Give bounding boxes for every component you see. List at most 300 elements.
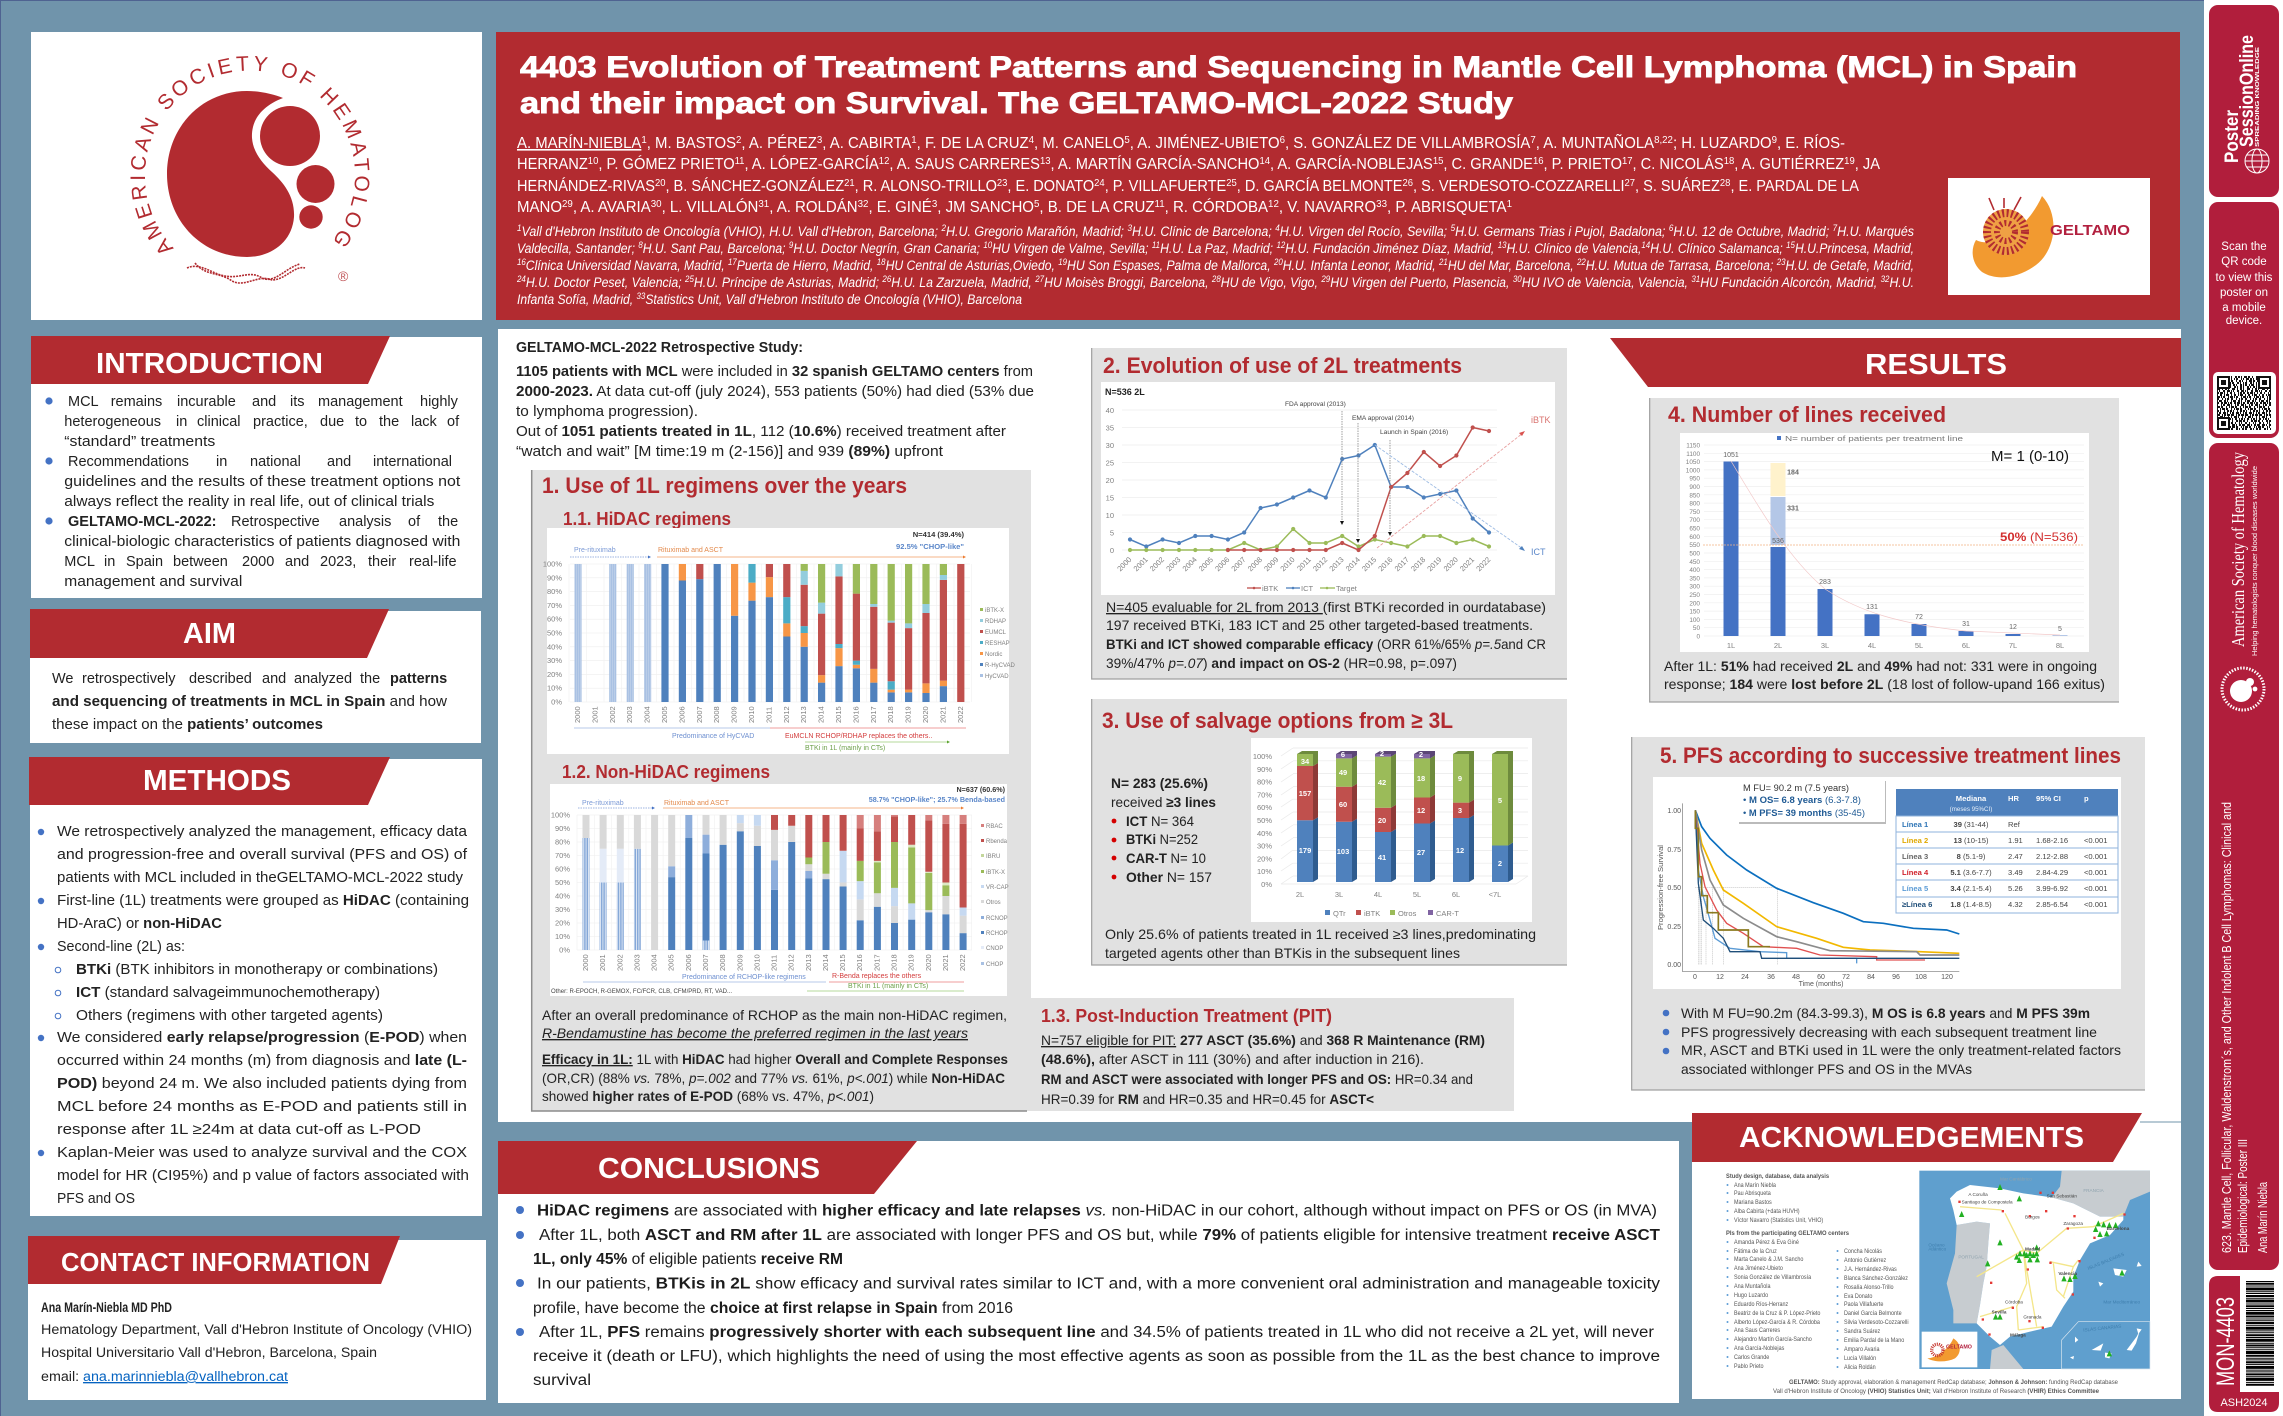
chart: 2L line chart: EMA approval (2014) [1352,415,1414,422]
conclusions text: After 1L, both ASCT and RM after 1L are associated with longer PFS and OS but, while 79% of patients eligible for intensive treatment receive ASCT [539,1227,1661,1244]
section 1 commentary [542,1008,1008,1104]
chart: HiDAC stacked bars: 2008 [712,706,721,723]
chart: 3D stacked bars: 2 [1380,749,1384,758]
introduction text: Retrospective [231,514,320,530]
chart: lines bar chart: 1000 [1686,467,1700,474]
chart: 2L line chart: 2005 [1197,555,1215,573]
chart: HiDAC stacked bars: 70% [547,601,562,610]
ASH name vertical: American Society of Hematology [2228,452,2248,647]
acknowledgement lists: Carlos Grande [1734,1353,1770,1361]
table: median PFS per line: p [2084,794,2089,803]
section 1 commentary: (OR,CR) (88% vs. 78%, p=.002 and 77% vs. 61%, p<.001) while Non-HiDAC [542,1071,1005,1086]
chart: 3D stacked bars: 3L [1335,890,1343,899]
table: median PFS per line: Línea 5 [1902,884,1929,893]
chart: Kaplan-Meier PFS curves: Progression-free Survival [1656,845,1665,930]
table: median PFS per line: Línea 2 [1902,836,1928,845]
introduction text: the [379,414,399,430]
chart: 2L line chart: ICT [1531,547,1546,557]
affiliations: Valdecilla, Santander; 8H.U. Sant Pau, Barcelona; 9H.U. Doctor Negrín, Gran Canaria; 10HU Virgen de Valme, Sevilla; 11H.U. La Paz, Madrid; 12H.U. Fundación Jiménez Díaz, Madrid, 13H.U. Clínico de Valencia,14H.U. Clínico Salamanca; 15H.U.Princesa, Madrid, [517,240,1914,256]
QR instructions: to view this [2216,272,2273,284]
heading: acknowledgements [1692,1113,2142,1162]
chart: lines bar chart: 300 [1689,584,1700,591]
chart: 3D stacked bars: <7L [1489,890,1501,899]
chart: Non-HiDAC stacked bars: 2007 [701,954,710,971]
chart: lines bar chart: 950 [1689,476,1700,483]
table: median PFS per line: 4.32 [2008,900,2023,909]
heading: contact information [28,1236,400,1284]
chart: 2L line chart: 2014 [1344,555,1362,573]
section 4 commentary: After 1L: 51% had received 2L and 49% had not: 331 were in ongoing [1664,659,2097,674]
chart: 2L line chart: 5 [1110,528,1114,538]
QR instructions: a mobile [2222,302,2266,314]
chart: lines bar chart: 150 [1689,609,1700,616]
chart: 3D stacked bars: CAR-T [1436,909,1459,918]
introduction text: MCL [64,554,95,570]
chart: Non-HiDAC stacked bars: VR-CAP [986,885,1009,891]
chart: lines bar chart: 3L [1821,641,1829,650]
acknowledgement lists: Study design, database, data analysis [1726,1173,1829,1180]
section 5 commentary: MR, ASCT and BTKi used in 1L were the only treatment-related factors [1681,1043,2121,1058]
map: participating centers in Spain: Atlántico [1928,1247,1947,1252]
salvage counts list: ICT N= 364 [1126,814,1194,829]
section 1 commentary: showed higher rates of E-POD (68% vs. 47%, p<.001) [542,1089,874,1104]
panel: ASH logo [31,32,482,320]
chart: 3D stacked bars: 3 [1458,806,1462,815]
chart: Non-HiDAC stacked bars: N=637 (60.6%) [956,785,1006,794]
introduction text: national [250,454,301,470]
section 1 commentary: R-Bendamustine has become the preferred regimen in the last years [542,1026,968,1041]
introduction bullets [45,397,53,525]
QR instructions: Scan the [2221,241,2267,253]
callout: median follow-up: • M PFS= 39 months (35-45) [1743,808,1865,818]
acknowledgement lists: Eduardo Ríos-Herranz [1734,1300,1788,1308]
acknowledgement lists: Alberto López-García & R. Córdoba [1734,1318,1820,1326]
acknowledgement lists: Blanca Sánchez-González [1844,1274,1908,1282]
introduction text: management and survival [64,574,242,590]
heading: 1.1 HiDAC: 1.1. HiDAC regimens [563,509,731,529]
chart: Non-HiDAC stacked bars: Other: R-EPOCH, R-GEMOX, FC/FCR, CLB, CFM/PRD, RT, VAD... [551,988,732,995]
chart: 2L line chart: iBTK [1531,415,1551,425]
chart: lines bar chart: 600 [1689,534,1700,541]
section 3 commentary [1105,927,1536,961]
map: participating centers in Spain: Madrid [2025,1247,2040,1252]
introduction text: of [408,514,421,530]
chart: lines bar chart: 12 [2009,624,2017,631]
acknowledgement lists: Rosalía Alonso-Trillo [1844,1283,1894,1291]
heading: section 5: 5. PFS according to successive treatment lines [1660,743,2121,768]
chart: 2L line chart: 2010 [1278,555,1297,573]
chart: HiDAC stacked bars: 20% [547,670,562,679]
chart: lines bar chart: 550 [1689,542,1700,549]
introduction text [64,394,460,590]
introduction text: Recommendations [68,454,189,470]
methods text: First-line (1L) treatments were grouped as HiDAC (containing [57,893,469,909]
chart: Non-HiDAC stacked bars: 2000 [581,954,590,971]
table: median PFS per line: 2.12-2.88 [2036,852,2068,861]
chart: HiDAC stacked bars: 90% [547,573,562,582]
ASH tagline vertical: Helping hematologists conquer blood diseases worldwide [2252,466,2259,656]
introduction text: clinical [197,414,241,430]
chart: Non-HiDAC stacked bars: RCNOP [986,916,1008,922]
icon: globe [2245,149,2269,173]
chart: 3D stacked bars: 6L [1452,890,1460,899]
chart: Non-HiDAC stacked bars: 2013 [804,954,813,971]
panel: 5. PFS by treatment line [1631,737,2145,1090]
PosterSessionOnline wordmark [2222,35,2261,163]
chart: Non-HiDAC stacked bars: BTKi in 1L (mainly in CTs) [848,983,928,990]
chart: HiDAC stacked bars: RESHAP [985,641,1010,647]
contact text: Ana Marín-Niebla MD PhD [41,1300,172,1315]
chart: lines bar chart: 7L [2009,641,2017,650]
chart: HiDAC stacked bars: 2004 [643,706,652,723]
chart: HiDAC stacked bars: 2002 [608,706,617,723]
authors: HERRANZ10, P. GÓMEZ PRIETO11, A. LÓPEZ-GARCÍA12, A. SAUS CARRERES13, A. MARTÍN GARCÍA-SANCHO14, A. GARCÍA-NOBLEJAS15, C. GRANDE16, P. PRIETO17, C. NICOLÁS18, A. GUTIÉRREZ19, JA [517,154,1880,173]
table: median PFS per line: 1.68-2.16 [2036,836,2068,845]
table: median PFS per line: 95% CI [2036,794,2061,803]
map: participating centers in Spain: A Coruña [1968,1192,1988,1197]
section 1 commentary: Efficacy in 1L: 1L with HiDAC had higher Overall and Complete Responses [542,1052,1008,1067]
icon: GELTAMO logo: GELTAMO [2050,222,2130,239]
introduction text: in [176,414,187,430]
chart: 3D stacked bars: 80% [1257,778,1272,787]
panel: 4. number of lines [1649,398,2119,702]
methods text: POD) beyond 24 m. We also included patients dying from [57,1076,467,1092]
introduction text: real-life [409,554,457,570]
chart: Non-HiDAC stacked bars: CHOP [986,962,1003,968]
table: median PFS per line: <0.001 [2084,836,2107,845]
chart: 3D stacked bars: 12 [1417,806,1425,815]
table: median PFS per line: <0.001 [2084,852,2107,861]
chart: Kaplan-Meier PFS curves: 0 [1693,974,1697,981]
chart: lines bar chart: 4L [1868,641,1876,650]
PosterSessionOnline wordmark: SessionOnline [2237,35,2258,147]
chart: 3D stacked bars: 5L [1413,890,1421,899]
chart: 3D stacked bars: 27 [1417,848,1425,857]
panel: methods [29,757,482,1216]
chart: HiDAC stacked bars: 10% [547,684,562,693]
table: median PFS per line: <0.001 [2084,900,2107,909]
aim text: the [360,671,380,687]
chart: 2L line chart: 2007 [1229,555,1248,573]
map: participating centers in Spain: ISLAS BALEARES [2087,1252,2125,1271]
table: median PFS per line [1896,789,2118,913]
chart: HiDAC stacked bars: 2007 [695,706,704,723]
map: participating centers in Spain: Valencia [2058,1271,2077,1276]
contact text: Hematology Department, Vall d'Hebron Institute of Oncology (VHIO) [41,1322,472,1337]
methods text: Kaplan-Meier was used to analyze survival and the COX [57,1145,467,1161]
section 3 commentary: Only 25.6% of patients treated in 1L received ≥3 lines,predominating [1105,927,1536,942]
section 3 commentary: targeted agents other than BTKis in the subsequent lines [1105,946,1460,961]
table: median PFS per line: 2.85-6.54 [2036,900,2068,909]
chart: Non-HiDAC stacked bars: Rbenda [986,839,1008,845]
acknowledgement lists: Fátima de la Cruz [1734,1247,1777,1255]
session title vertical: Ana Marín Niebla [2255,1181,2270,1253]
chart: lines bar chart: 850 [1689,492,1700,499]
chart: 2L line chart: 0 [1110,546,1114,555]
panel: aim [30,609,481,743]
acknowledgement lists: J.A. Hernández-Rivas [1844,1265,1897,1273]
chart: 2L line chart: 20 [1106,476,1114,485]
aim text: these impact on the patients’ outcomes [52,717,323,733]
introduction text: always reflect the reality in real life, out of clinical trials [64,494,434,510]
chart: HiDAC stacked bars: 2006 [677,706,686,723]
introduction text: and [285,554,309,570]
acknowledgement lists: Pau Abrisqueta [1734,1189,1771,1197]
chart: HiDAC stacked bars: 30% [547,656,562,665]
heading: section 2: 2. Evolution of use of 2L treatments [1103,353,1462,378]
map: participating centers in Spain: FRANCIA [2083,1188,2105,1193]
acknowledgement lists: Mariana Bastos [1734,1198,1772,1206]
affiliations: 1Vall d'Hebron Instituto de Oncología (VHIO), H.U. Vall d'Hebron, Barcelona; 2H.U. Gregorio Marañón, Madrid; 3H.U. Clínic de Barcelona; 4H.U. Virgen del Rocío, Sevilla; 5H.U. Germans Trias i Pujol, Badalona; 6H.U. 12 de Octubre, Madrid; 7H.U. Marqués [517,223,1914,239]
callout: median follow-up: M FU= 90.2 m (7.5 years) [1743,783,1849,793]
chart: lines bar chart [1680,433,2089,652]
salvage counts list [1111,776,1216,885]
QR instructions: poster on [2220,287,2268,299]
chart: lines bar chart: 1150 [1686,442,1700,450]
icon: ASH mini logo [2222,668,2264,710]
acknowledgement lists: Antonio Gutiérrez [1844,1256,1886,1264]
introduction text: “standard” treatments [64,434,215,450]
introduction text: remains [111,394,162,410]
introduction text: guidelines and the results of these treatment options not [64,474,460,490]
chart: Non-HiDAC stacked bars: R-Benda replaces the others [832,973,922,980]
chart: lines bar chart: 1050 [1686,459,1700,466]
chart: 3D stacked bars: iBTK [1364,909,1380,918]
heading: contact information: CONTACT INFORMATION [61,1247,370,1277]
icon: GELTAMO logo [1948,178,2150,295]
table: median PFS per line: 39 (31-44) [1953,820,1989,829]
chart: 3D stacked bars: 103 [1337,847,1349,856]
heading: section 3: 3. Use of salvage options from ≥ 3L [1102,708,1453,733]
table: median PFS per line: 2.84-4.29 [2036,868,2068,877]
chart: Non-HiDAC stacked bars: 2017 [872,954,881,971]
chart: lines bar chart: 1L [1727,641,1735,650]
table: median PFS per line: 5.26 [2008,884,2023,893]
QR instructions: QR code [2221,256,2267,268]
salvage counts list: Other N= 157 [1126,870,1212,885]
chart: Non-HiDAC stacked bars: 2014 [821,954,830,971]
panel: introduction [31,336,482,598]
chart: 3D stacked bars: 2 [1498,859,1502,868]
chart: Non-HiDAC stacked bars: 2015 [838,954,847,971]
map: participating centers in Spain: Mar Cantábrico [2000,1177,2032,1182]
salvage counts list: received ≥3 lines [1111,795,1216,810]
methods text: occurred within 24 months (m) from diagnosis and late (L- [57,1053,467,1069]
introduction text: 2000 [242,554,274,570]
panel: 2. evolution of 2L treatments [1091,348,1567,679]
sidebar: session information panel [2209,443,2279,1270]
table: median PFS per line: Mediana [1956,794,1987,803]
introduction text: and [327,454,351,470]
methods text: model for HR (CI95%) and p value of factors associated with [57,1168,469,1184]
chart: lines bar chart: 5 [2058,626,2062,633]
chart: 2L line chart: 2002 [1148,555,1166,573]
introduction text: due [320,414,344,430]
PIT text: N=757 eligible for PIT: 277 ASCT (35.6%) and 368 R Maintenance (RM) [1041,1033,1485,1048]
chart: 3D stacked bars [1251,738,1532,922]
chart: 2L line chart: 2011 [1295,555,1313,573]
chart: 2L line chart: 2016 [1376,555,1395,573]
chart: lines bar chart: 750 [1689,509,1700,516]
acknowledgement lists: Alicia Roldán [1844,1363,1876,1371]
salvage counts list: CAR-T N= 10 [1126,851,1206,866]
chart: 3D stacked bars: 5 [1498,796,1502,805]
chart: lines bar chart: 650 [1689,526,1700,532]
callout: median follow-up [1737,779,1886,824]
map: participating centers in Spain: Córdoba [2005,1299,2023,1304]
chart: HiDAC stacked bars: 2018 [886,706,895,723]
acknowledgement lists: Sandra Suárez [1844,1327,1880,1335]
introduction text: between [173,554,228,570]
chart: 2L line chart: Target [1336,584,1358,593]
introduction text: heterogeneous [64,414,161,430]
QR code [2213,372,2276,434]
chart: Non-HiDAC stacked bars: 2019 [907,954,916,971]
chart: 3D stacked bars: 2 [1419,750,1423,759]
table: median PFS per line: Ref [2008,820,2021,829]
chart: lines bar chart: 500 [1689,550,1700,558]
chart: 3D stacked bars: 49 [1339,768,1347,777]
introduction text: management [318,394,403,410]
chart: HiDAC stacked bars: 2022 [956,706,965,723]
study summary text: 2000-2023. At data cut-off (july 2024), 553 patients (50%) had died (53% due [516,384,1034,400]
study summary text: GELTAMO-MCL-2022 Retrospective Study: [516,340,803,356]
section 1 commentary: After an overall predominance of RCHOP as the main non-HiDAC regimen, [542,1008,1007,1023]
methods text: We retrospectively analyzed the management, efficacy data [57,824,468,840]
chart: 3D stacked bars: 179 [1299,846,1311,855]
chart: HiDAC stacked bars: 2005 [660,706,669,723]
section 2 commentary [1106,600,1546,671]
chart: 3D stacked bars: 20 [1378,816,1386,825]
acknowledgement lists [1726,1171,2150,1395]
session title vertical [2219,802,2270,1253]
introduction text: Spain [126,554,163,570]
heading: introduction [31,336,390,384]
chart: HiDAC stacked bars: EuMCLN RCHOP/RDHAP replaces the others.. [785,733,932,740]
acknowledgement lists: PIs from the participating GELTAMO centers [1726,1230,1849,1237]
study summary text: to lymphoma progression). [516,404,698,420]
conclusions bullets [516,1206,524,1336]
acknowledgement lists: Alejandro Martín García-Sancho [1734,1335,1812,1343]
chart: Non-HiDAC stacked bars: 2018 [890,954,898,971]
map: participating centers in Spain: Granada [2023,1314,2042,1319]
acknowledgement footer text [1773,1379,2118,1395]
acknowledgement footer text: Vall d'Hebron Institute of Oncology (VHIO) Statistics Unit; Vall d'Hebron Institute of Research (VHIR) Ethics Committee [1773,1388,2099,1395]
icon: ASH budding circles [260,106,334,229]
chart: Kaplan-Meier PFS curves: 48 [1792,974,1800,981]
panel: 3. salvage options [1091,699,1567,965]
chart: 3D stacked bars: 10% [1257,867,1272,876]
table: median PFS per line: Línea 1 [1902,820,1929,829]
section 4 commentary: response; 184 were lost before 2L (18 lost of follow-upand 166 exitus) [1664,677,2105,692]
section 5 bullets [1663,1010,1669,1054]
chart: HiDAC stacked bars: 2012 [782,706,791,723]
conclusions text: receive it (death or LFU), which highlights the need of using the most effective agents as soon as possible from the 1L as the best chance to improve [533,1348,1660,1365]
introduction text: lack [411,414,438,430]
study summary text [516,340,1034,460]
session title vertical: 623. Mantle Cell, Follicular, Waldenstrom´s, and Other Indolent B Cell Lymphomas: Clinical and [2219,802,2234,1253]
title [520,51,2077,120]
chart: 2L line chart: 40 [1106,406,1114,415]
chart: Non-HiDAC stacked bars: Predominance of RCHOP-like regimens [682,974,806,981]
heading: 1.3 PIT: 1.3. Post-Induction Treatment (PIT) [1041,1006,1332,1026]
chart: 2L line chart: 2003 [1164,555,1182,573]
chart: Non-HiDAC stacked bars: Pre-rituximab [582,800,624,807]
chart: Non-HiDAC stacked bars: 2001 [598,954,607,971]
panel: acknowledgements [1692,1113,2181,1399]
table: median PFS per line: Línea 4 [1902,868,1929,877]
aim text [52,671,448,733]
introduction text: and [252,394,276,410]
acknowledgement lists: Concha Nicolás [1844,1247,1882,1255]
authors: HERNÁNDEZ-RIVAS20, B. SÁNCHEZ-GONZÁLEZ21, R. ALONSO-TRILLO23, E. DONATO24, P. VILLAFUERTE25, D. GARCÍA BELMONTE26, S. VERDESOTO-COZZARELLI27, S. SUÁREZ28, E. PARDAL DE LA [517,176,1859,195]
chart: Non-HiDAC stacked bars: 2021 [941,954,950,971]
sidebar: PosterSessionOnline panel [2209,5,2279,197]
chart: 2L line chart: 30 [1106,441,1114,450]
chart: 2L line chart: iBTK [1262,584,1278,593]
chart: Non-HiDAC stacked bars: 2008 [718,954,727,971]
chart: Non-HiDAC stacked bars: 10% [555,932,570,941]
chart: lines bar chart: 800 [1689,501,1700,508]
chart: Non-HiDAC stacked bars: 60% [555,864,570,874]
chart: Kaplan-Meier PFS curves: 0.00 [1667,962,1681,969]
authors: MANO29, A. AVARIA30, L. VILLALÓN31, A. ROLDÁN32, E. GINÉ3, JM SANCHO5, B. DE LA CRUZ11, R. CÓRDOBA12, V. NAVARRO33, P. ABRISQUETA1 [517,197,1512,216]
map: participating centers in Spain: Barcelona [2107,1226,2130,1231]
acknowledgement lists: Pablo Prieto [1734,1362,1764,1370]
introduction text: highly [420,394,459,410]
chart: 2L line chart: 2018 [1409,555,1427,573]
chart: lines bar chart: 200 [1689,600,1700,607]
chart: 2L line chart: 2015 [1360,555,1378,573]
acknowledgement lists: Víctor Navarro (Statistics Unit, VHIO) [1734,1216,1823,1224]
table: median PFS per line: 3.99-6.92 [2036,884,2068,893]
acknowledgement footer text: GELTAMO: Study approval, elaboration & management RedCap database; Johnson & Johnson: funding RedCap database [1789,1379,2118,1386]
affiliations: 24H.U. Doctor Peset, Valencia; 25H.U. Príncipe de Asturias, Madrid; 26H.U. La Zarzuela, Madrid, 27HU Moisès Broggi, Barcelona, 28HU de Vigo, Vigo, 29HU Virgen del Puerto, Plasencia, 30HU IVO de Valencia, Valencia, 31HU Fundación Alcorcón, Madrid, 32H.U. [516,274,1914,290]
chart: lines bar chart: 72 [1915,614,1923,621]
chart: Kaplan-Meier PFS curves: Time (months) [1799,981,1843,988]
methods text [57,824,469,1207]
section 5 commentary: associated withlonger PFS and OS in the MVAs [1681,1062,1972,1077]
conference tag: ASH2024 [2220,1397,2268,1409]
chart: lines bar chart: 100 [1689,617,1700,624]
chart: Non-HiDAC stacked bars: 70% [555,851,570,860]
methods text: Others (regimens with other targeted agents) [76,1008,383,1024]
heading: methods: METHODS [143,765,291,797]
chart: Non-HiDAC stacked bars: Rituximab and ASCT [664,800,730,807]
authors [517,132,1880,216]
chart: HiDAC stacked bars: 2015 [834,706,843,723]
chart: 2L line chart: 10 [1106,511,1114,520]
table: median PFS per line: Línea 3 [1902,852,1928,861]
heading: methods [29,757,390,805]
section 4 commentary [1664,659,2105,692]
contact text [41,1300,472,1384]
section 2 commentary: 39%/47% p=.07) and impact on OS-2 (HR=0.98, p=.097) [1106,656,1457,671]
chart: Non-HiDAC stacked bars: iBTK-X [986,870,1005,876]
chart: 3D stacked bars: 40% [1257,829,1272,838]
study summary text: “watch and wait” [M time:19 m (2-156)] and 939 (89%) upfront [516,444,943,460]
chart: 3D stacked bars: 60% [1257,803,1272,812]
title: 4403 Evolution of Treatment Patterns and Sequencing in Mantle Cell Lymphoma (MCL) in Spain [520,51,2077,84]
chart: 2L line chart: ICT [1301,584,1314,593]
chart: 3D stacked bars: 2L [1296,890,1304,899]
introduction text: of [447,414,460,430]
chart: Non-HiDAC stacked bars: 90% [555,824,570,833]
chart: Non-HiDAC stacked bars: 80% [555,838,570,846]
chart: 2L line chart [1101,382,1555,595]
chart: lines bar chart: 900 [1689,484,1700,491]
heading: conclusions [498,1141,917,1194]
